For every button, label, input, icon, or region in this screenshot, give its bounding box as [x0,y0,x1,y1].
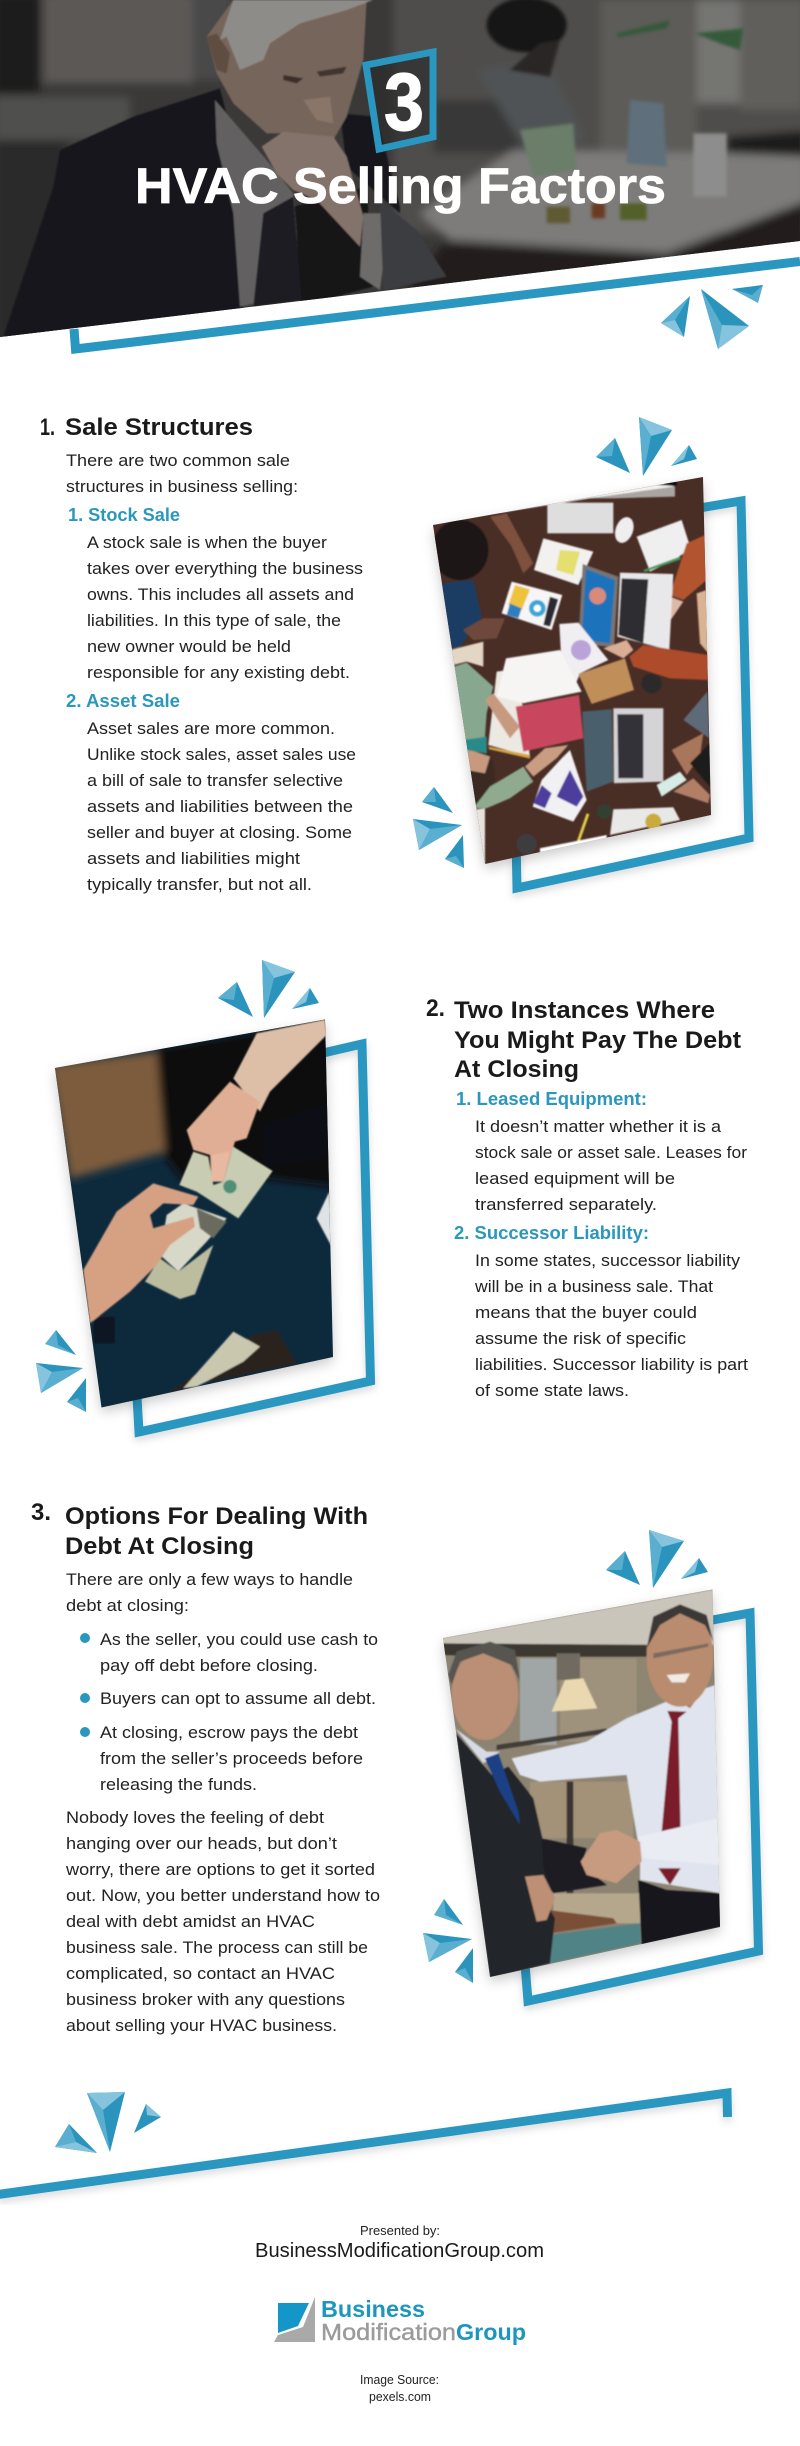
presented by text [255,2223,544,2262]
heading 2: 2. [426,995,445,1022]
intro paragraph: There are two common sale [66,452,290,470]
asset sale paragraph: seller and buyer at closing. Some [87,824,352,842]
icon: footer triangle cluster [55,2092,161,2153]
section 2 text [426,995,748,1400]
heading 1: 1. [40,414,55,441]
successor liability paragraph: liabilities. Successor liability is part [475,1356,748,1374]
photo: two businessmen shaking hands [440,1585,730,1985]
icon: section 2 top triangle cluster [218,960,319,1018]
subheading leased equipment: 1. Leased Equipment: [456,1089,647,1109]
logo icon [274,2297,315,2342]
icon: header triangle cluster [661,285,763,349]
stock sale paragraph: owns. This includes all assets and [87,586,354,604]
icon: section 3 top triangle cluster [606,1530,708,1588]
heading 3: 3. [31,1499,51,1526]
subheading stock sale: 1. Stock Sale [68,505,180,525]
header top line and corner [74,262,800,349]
header photo: man thinking in office [0,0,800,347]
leased equipment paragraph: transferred separately. [475,1196,657,1214]
asset sale paragraph: typically transfer, but not all. [87,876,312,894]
title: HVAC Selling Factors [135,158,666,214]
heading 3: Debt At Closing [65,1533,254,1560]
icon: section 3 bottom triangle cluster [423,1899,473,1983]
bullet list: Buyers can opt to assume all debt. [100,1690,376,1708]
intro paragraph [66,1571,353,1615]
asset sale paragraph: assets and liabilities might [87,850,300,868]
heading 2: Two Instances Where [454,997,715,1024]
closing paragraph: Nobody loves the feeling of debt [66,1809,324,1827]
stock sale paragraph: responsible for any existing debt. [87,664,350,682]
bullet list [80,1631,378,1794]
leased equipment paragraph [475,1118,748,1214]
leased equipment paragraph: It doesn’t matter whether it is a [475,1118,722,1136]
asset sale paragraph: Unlike stock sales, asset sales use [87,746,356,764]
subheading asset sale: 2. Asset Sale [66,691,180,711]
successor liability paragraph [474,1252,748,1400]
frame: section 2 photo [120,1044,370,1432]
stock sale paragraph: A stock sale is when the buyer [87,534,328,552]
image source text: pexels.com [369,2389,431,2404]
stock sale paragraph [87,534,363,682]
intro paragraph: debt at closing: [66,1597,189,1615]
bullet list: As the seller, you could use cash to [100,1631,378,1649]
successor liability paragraph: means that the buyer could [475,1304,697,1322]
closing paragraph: hanging over our heads, but don’t [66,1835,337,1853]
stock sale paragraph: liabilities. In this type of sale, the [87,612,341,630]
logo wordmark: Group [456,2319,526,2345]
asset sale paragraph: a bill of sale to transfer selective [87,772,343,790]
presented by text: BusinessModificationGroup.com [255,2240,544,2262]
closing paragraph: about selling your HVAC business. [66,2017,337,2035]
heading 2: You Might Pay The Debt [454,1027,741,1054]
leased equipment paragraph: stock sale or asset sale. Leases for [475,1144,748,1162]
asset sale paragraph: assets and liabilities between the [87,798,353,816]
logo wordmark [321,2296,526,2345]
closing paragraph: complicated, so contact an HVAC [66,1965,335,1983]
frame: section 3 photo [500,1613,758,2001]
heading 3 [31,1499,368,1560]
logo wordmark: Business [321,2296,425,2322]
asset sale paragraph [87,720,356,894]
bullet list: At closing, escrow pays the debt [100,1724,358,1742]
asset sale paragraph: Asset sales are more common. [87,720,335,738]
footer line with corner [0,2093,728,2194]
successor liability paragraph: of some state laws. [475,1382,629,1400]
successor liability paragraph: In some states, successor liability [475,1252,741,1270]
bullet list: from the seller’s proceeds before [100,1750,363,1768]
number badge frame with 3: 3 [384,57,424,148]
intro paragraph [66,452,298,496]
icon: section 2 bottom triangle cluster [36,1330,86,1412]
closing paragraph [65,1809,380,2035]
icon: section 1 bottom triangle cluster [413,787,464,868]
photo: team meeting table seen from above [430,470,717,870]
section 1 text [40,414,363,894]
leased equipment paragraph: leased equipment will be [475,1170,675,1188]
intro paragraph: structures in business selling: [66,478,298,496]
photo: hands exchanging cash [50,1015,343,1415]
successor liability paragraph: assume the risk of specific [475,1330,686,1348]
image source text: Image Source: [360,2372,439,2387]
closing paragraph: business sale. The process can still be [66,1939,368,1957]
number badge frame with 3 [362,48,436,153]
icon: section 1 top triangle cluster [596,417,697,476]
subheading successor liability: 2. Successor Liability: [454,1223,649,1243]
intro paragraph: There are only a few ways to handle [66,1571,353,1589]
image source text [360,2372,439,2404]
closing paragraph: out. Now, you better understand how to [66,1887,380,1905]
closing paragraph: deal with debt amidst an HVAC [66,1913,315,1931]
logo: Business Modification Group [274,2296,526,2345]
heading 1: Sale Structures [65,414,253,441]
stock sale paragraph: new owner would be held [87,638,291,656]
presented by text: Presented by: [360,2223,440,2238]
bullet list: pay off debt before closing. [100,1657,318,1675]
section 3 text [31,1499,380,2035]
bullet list: releasing the funds. [100,1776,257,1794]
heading 3: Options For Dealing With [65,1503,368,1530]
closing paragraph: worry, there are options to get it sorted [65,1861,375,1879]
closing paragraph: business broker with any questions [66,1991,345,2009]
successor liability paragraph: will be in a business sale. That [474,1278,713,1296]
stock sale paragraph: takes over everything the business [87,560,363,578]
frame: section 1 photo [510,501,749,888]
logo wordmark: Modification [321,2319,456,2345]
heading 2: At Closing [454,1056,579,1083]
heading 2 [426,995,741,1083]
